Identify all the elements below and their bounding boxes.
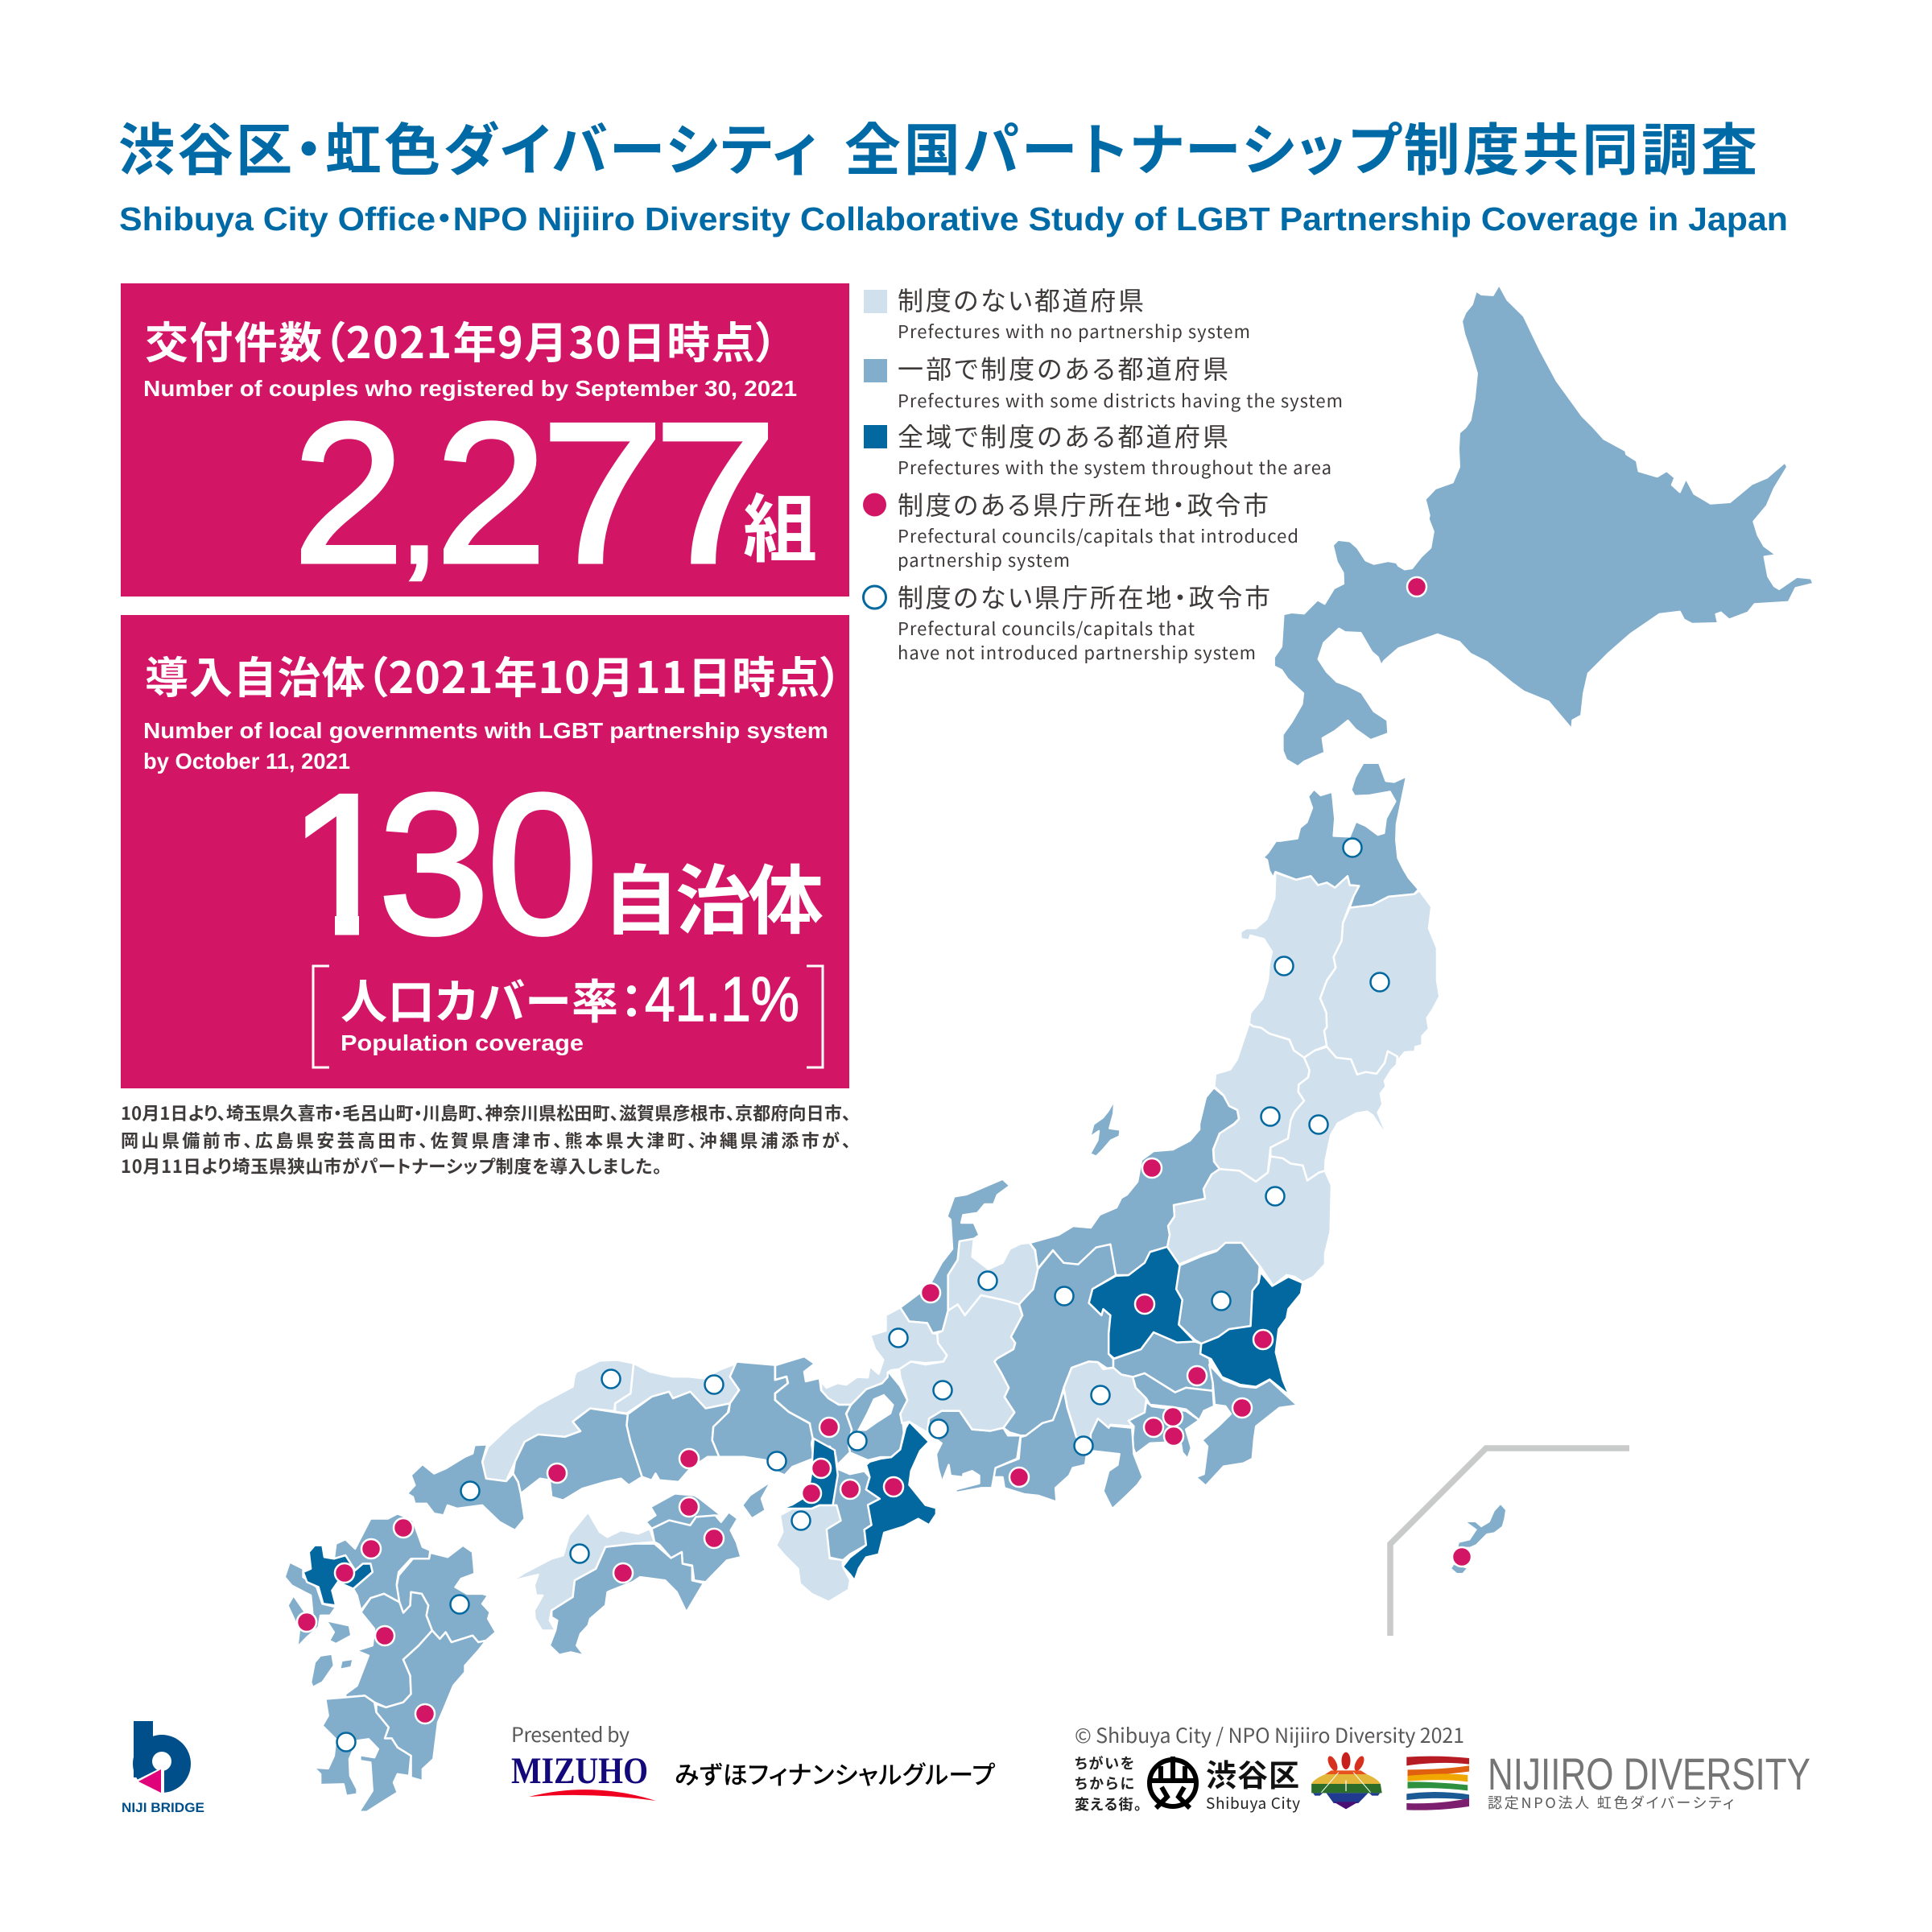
Ishikawa, Nagano, Saitama, Tochigi, Tokyo, Kanagawa, Chiba xyxy=(819,1179,1298,1560)
map: Sado island xyxy=(1090,1100,1121,1157)
title: 全国パートナーシップ制度共同調査 xyxy=(844,105,1757,187)
big number 2,277: , xyxy=(400,439,438,592)
Lake Biwa xyxy=(857,1394,894,1431)
icon: b mark xyxy=(132,1721,191,1800)
logo: Nijiiro Diversity xyxy=(1406,1748,1810,1813)
Osaka and Saga xyxy=(303,1439,838,1605)
logo: Shibuya City xyxy=(1075,1751,1300,1814)
legend: some districts: Prefectures with some districts having the system xyxy=(898,387,1343,413)
title: 渋谷区・虹色ダイバーシティ xyxy=(118,105,817,187)
panel: local governments xyxy=(121,615,849,1088)
map: Okinawa inset frame xyxy=(1390,1448,1629,1636)
panel subheading xyxy=(143,718,828,774)
legend: capitals without system: Prefectural councils/capitals that xyxy=(898,615,1195,641)
legend: no system: Prefectures with no partnership system xyxy=(898,318,1250,344)
legend: no system: 制度のない都道府県 xyxy=(898,281,1144,318)
panel heading: 交付件数（2021年9月30日時点） xyxy=(145,308,778,371)
Hiroshima, Okayama, Hyogo, Awaji, Yamaguchi, Shikoku, Kyushu xyxy=(285,1361,814,1812)
big number 2,277: 7 xyxy=(541,382,664,605)
icon: rainbow top xyxy=(1311,1752,1382,1809)
panel heading: 導入自治体（2021年10月11日時点） xyxy=(145,642,842,706)
map: Kyoto xyxy=(775,1356,852,1465)
legend: capitals with system xyxy=(863,485,1298,572)
note text: 10月1日より、埼玉県久喜市・毛呂山町・川島町、神奈川県松田町、滋賀県彦根市、京都府向日市、 xyxy=(121,1100,851,1125)
panel: registered couples xyxy=(121,283,849,605)
coverage label: 人口カバー率 xyxy=(341,964,618,1032)
big number 130: 1 xyxy=(288,752,399,976)
logo text: NIJI BRIDGE xyxy=(122,1800,204,1815)
map: Okinawa xyxy=(1451,1505,1505,1573)
legend: capitals with system: partnership system xyxy=(898,547,1070,572)
panel subheading: Number of couples who registered by September 30, 2021 xyxy=(143,376,797,401)
coverage caption: Population coverage xyxy=(341,1030,584,1055)
legend: some districts xyxy=(864,349,1343,413)
legend: capitals with system: 制度のある県庁所在地・政令市 xyxy=(898,485,1269,522)
wordmark: NIJIIRO DIVERSITY xyxy=(1488,1748,1810,1799)
map markers: capitals with system xyxy=(297,577,1472,1724)
panel subheading: by October 11, 2021 xyxy=(143,749,350,774)
presented by label: Presented by xyxy=(511,1719,630,1748)
legend: throughout area: 全域で制度のある都道府県 xyxy=(898,417,1228,454)
legend: throughout area xyxy=(864,417,1331,480)
subtitle: Shibuya City Office・NPO Nijiiro Diversity Collaborative Study of LGBT Partnership Coverage in Japan xyxy=(119,200,1788,237)
Tottori, Shimane, Wakayama, Ehime xyxy=(482,1360,850,1630)
note text: 10月11日より埼玉県狭山市がパートナーシップ制度を導入しました。 xyxy=(121,1153,662,1179)
big number 130: 3 xyxy=(378,752,489,976)
Shibuya name: 渋谷区 xyxy=(1206,1751,1299,1795)
legend: capitals without system xyxy=(863,578,1270,665)
panel subheading: Number of local governments with LGBT partnership system xyxy=(143,718,828,743)
legend: no system xyxy=(864,281,1250,344)
note text: 岡山県備前市、広島県安芸高田市、佐賀県唐津市、熊本県大津町、沖縄県浦添市が、 xyxy=(121,1127,851,1153)
coverage colon: ： xyxy=(620,964,643,1032)
big number 2,277: 7 xyxy=(654,382,777,605)
icon: rainbow stripes xyxy=(1406,1757,1469,1810)
big number 130: 0 xyxy=(487,752,598,976)
legend: capitals without system: have not introduced partnership system xyxy=(898,639,1256,665)
coverage value: 41.1% xyxy=(645,964,799,1034)
copyright: © Shibuya City / NPO Nijiiro Diversity 2021 xyxy=(1075,1720,1464,1749)
map markers: capitals without system xyxy=(336,839,1389,1752)
map: Tohoku prefectures xyxy=(1166,763,1439,1286)
Mizuho wordmark: MIZUHO xyxy=(511,1750,648,1792)
icon: red swoosh xyxy=(529,1790,656,1801)
slogan: 変える街。 xyxy=(1075,1794,1141,1814)
map: Hokkaido xyxy=(1274,285,1814,766)
Shibuya English name: Shibuya City xyxy=(1206,1792,1300,1814)
Akita, Iwate, Miyagi, Yamagata, Fukushima xyxy=(1166,873,1439,1286)
map: Niigata xyxy=(1030,1088,1239,1275)
population coverage bracket xyxy=(313,966,823,1067)
unit: 自治体 xyxy=(603,840,824,950)
legend: capitals without system: 制度のない県庁所在地・政令市 xyxy=(898,578,1270,615)
note text xyxy=(121,1100,851,1179)
Aomori xyxy=(1263,763,1418,908)
slogan: ちがいを xyxy=(1075,1752,1134,1773)
sponsor: Mizuho xyxy=(511,1719,996,1801)
big number 2,277: 2 xyxy=(293,381,404,605)
Mizuho Japanese name: みずほフィナンシャルグループ xyxy=(675,1755,996,1791)
legend: some districts: 一部で制度のある都道府県 xyxy=(898,349,1228,386)
map: Kanto and Chubu prefectures xyxy=(819,1179,1302,1580)
slogan: ちからに xyxy=(1075,1773,1134,1794)
organization name: 認定NPO法人 虹色ダイバーシティ xyxy=(1488,1792,1734,1813)
map: western Japan prefectures xyxy=(285,1360,850,1812)
legend: capitals with system: Prefectural councils/capitals that introduced xyxy=(898,522,1298,548)
big number 2,277: 2 xyxy=(436,381,547,605)
legend xyxy=(863,281,1343,665)
unit: 組 xyxy=(743,470,817,577)
Gunma, Ibaraki, Mie xyxy=(843,1247,1302,1580)
legend: throughout area: Prefectures with the system throughout the area xyxy=(898,454,1331,480)
big number 2,277 xyxy=(293,381,777,605)
big number 130 xyxy=(274,752,598,976)
title xyxy=(118,105,1757,187)
icon: Shibuya emblem xyxy=(1150,1757,1196,1808)
slogan xyxy=(1075,1752,1141,1814)
map of Japan xyxy=(285,285,1814,1812)
Toyama, Gifu, Fukui, Yamanashi xyxy=(821,1239,1146,1442)
logo: Niji Bridge xyxy=(122,1721,204,1815)
